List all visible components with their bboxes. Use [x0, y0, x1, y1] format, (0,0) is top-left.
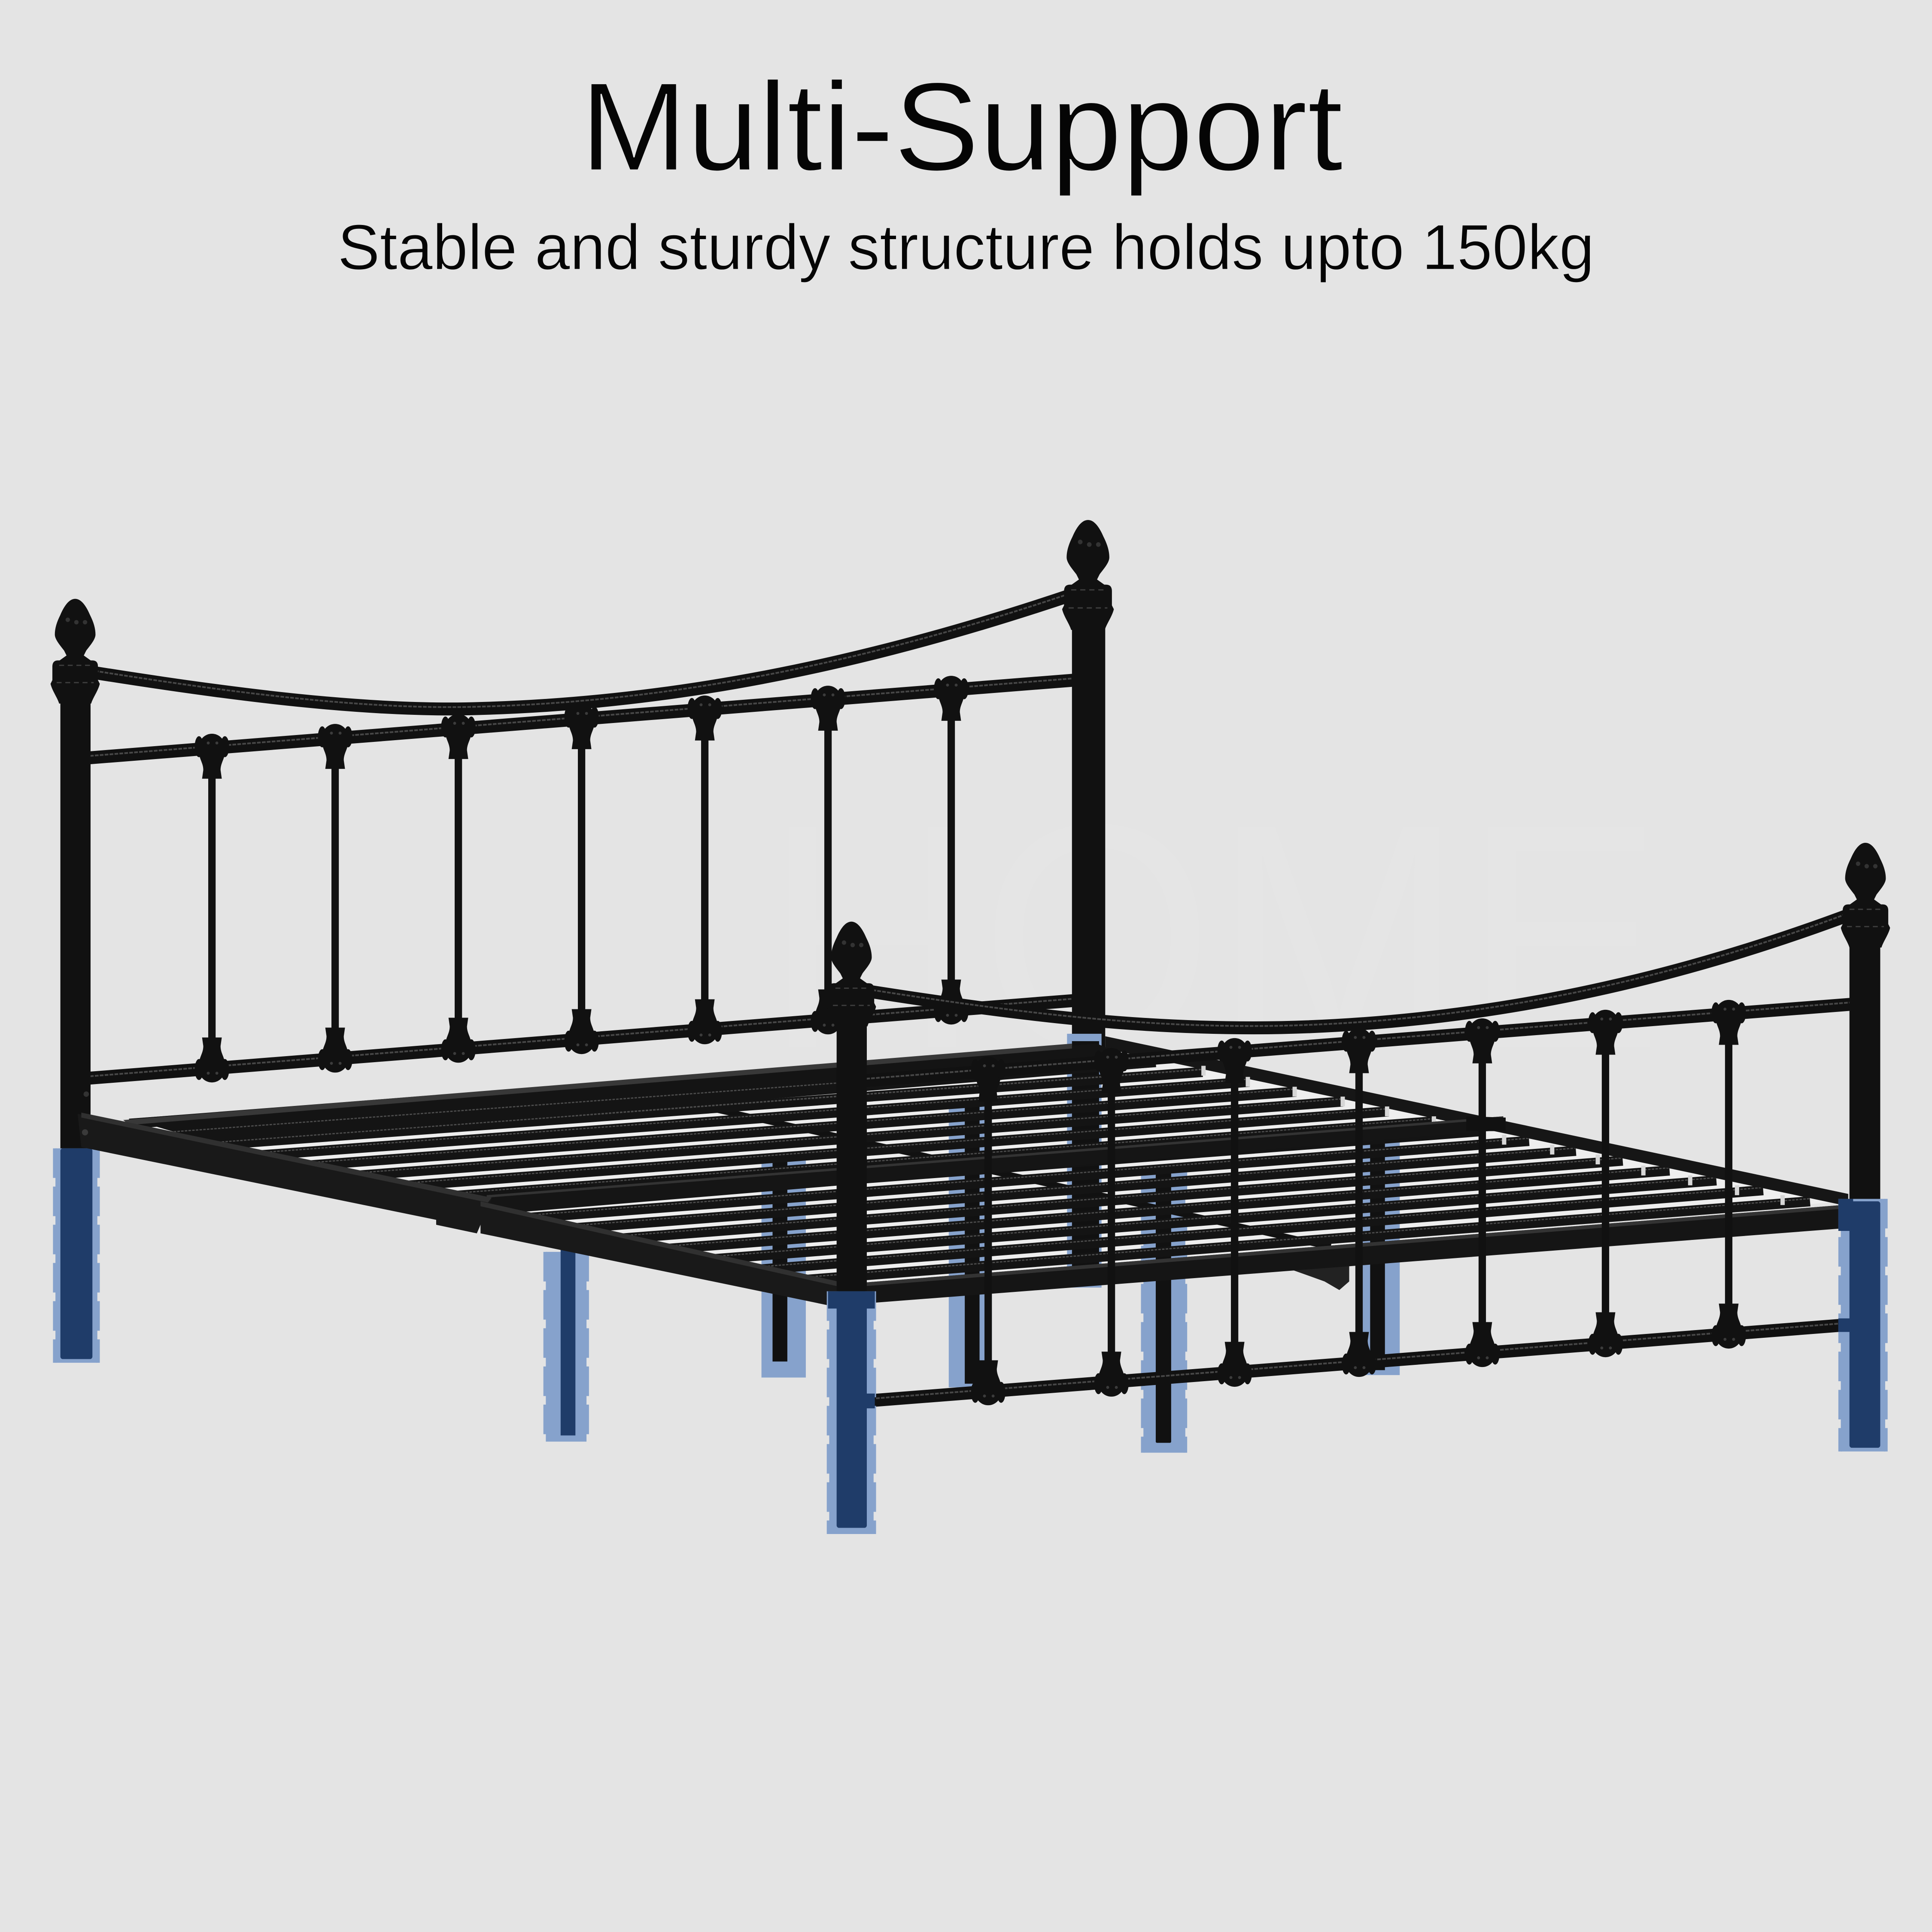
left side rail: foot half	[480, 1201, 838, 1307]
bed slats	[129, 1044, 1810, 1281]
bed frame illustration	[51, 520, 1890, 1534]
head-end rail	[123, 1044, 1072, 1125]
title: Multi-Support	[580, 57, 1343, 197]
leg: rear centre left	[762, 1158, 806, 1378]
foot-end rail	[863, 1205, 1842, 1303]
subtitle: Stable and sturdy structure holds upto 150kg	[337, 211, 1595, 283]
leg: foot right highlighted	[1838, 1199, 1886, 1452]
footboard lower rail	[866, 1323, 1851, 1401]
deck backing seen through the slat gaps	[129, 1047, 1842, 1291]
leg: centre left	[545, 1245, 587, 1442]
leg: foot left highlighted	[828, 1291, 875, 1534]
footboard top curved rail	[872, 912, 1851, 1028]
headboard left post	[51, 599, 100, 1152]
footboard left post	[827, 922, 876, 1294]
headboard horizontal rails	[90, 678, 1075, 1078]
leg: front centre	[949, 1106, 992, 1388]
leg: front right centre	[1143, 1170, 1185, 1453]
footboard right post	[1841, 843, 1890, 1203]
headboard	[51, 520, 1114, 1152]
footboard upper rail	[866, 1002, 1852, 1081]
headboard right post	[1062, 520, 1114, 1047]
headboard spindles	[194, 676, 969, 1082]
leg: head right	[1067, 1034, 1102, 1288]
headboard top curved rail	[95, 592, 1075, 709]
far side rail with slat tabs	[1105, 1036, 1848, 1206]
footboard	[827, 843, 1890, 1534]
left side rail: head half	[78, 1113, 492, 1233]
faint watermark: HOME	[764, 758, 1663, 1115]
central long beam under slats	[604, 1084, 1331, 1247]
footboard spindles	[971, 1000, 1746, 1405]
leg: rear right centre	[1357, 1126, 1400, 1375]
central cross beam	[487, 1116, 1506, 1215]
under-deck bracket	[1290, 1264, 1349, 1290]
leg: head left	[55, 1148, 98, 1363]
highlighted legs behind the deck	[55, 1034, 1842, 1453]
